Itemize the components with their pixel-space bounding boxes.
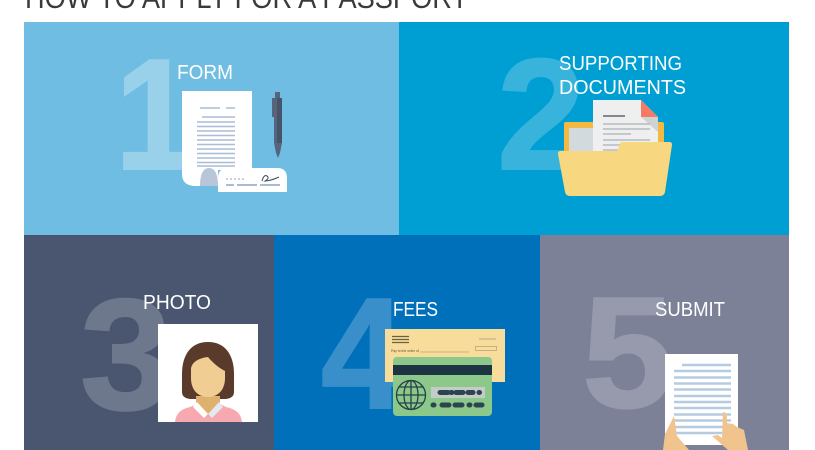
label: supporting documents xyxy=(559,53,686,99)
icon: credit card xyxy=(393,357,492,416)
panel: form xyxy=(24,22,399,235)
icon: check and card xyxy=(385,329,505,416)
icon: passport photo xyxy=(158,324,258,422)
panel: supporting documents xyxy=(399,22,789,235)
icon: right hand xyxy=(712,412,748,450)
label: supporting documents: DOCUMENTS xyxy=(559,77,686,99)
icon: pen xyxy=(272,92,282,158)
icon: document held in hands xyxy=(663,354,748,450)
number 2: 2 xyxy=(497,27,585,203)
icon: left hand xyxy=(663,416,689,450)
number 1: 1 xyxy=(115,27,195,203)
icon: folder with papers xyxy=(558,100,672,196)
panel: submit xyxy=(540,235,789,450)
icon: form and signature xyxy=(182,91,287,192)
number 4: 4 xyxy=(321,266,405,442)
label: fees: FEES xyxy=(393,299,438,321)
label: supporting documents: SUPPORTING xyxy=(559,53,682,75)
label: form: FORM xyxy=(177,62,233,84)
icon: check: Pay to the order of xyxy=(391,349,419,353)
panel: photo xyxy=(24,235,274,450)
panel: fees xyxy=(274,235,540,450)
label: photo: PHOTO xyxy=(143,292,211,314)
number 5: 5 xyxy=(582,265,674,441)
label: submit: SUBMIT xyxy=(655,299,725,321)
number 3: 3 xyxy=(80,267,172,443)
